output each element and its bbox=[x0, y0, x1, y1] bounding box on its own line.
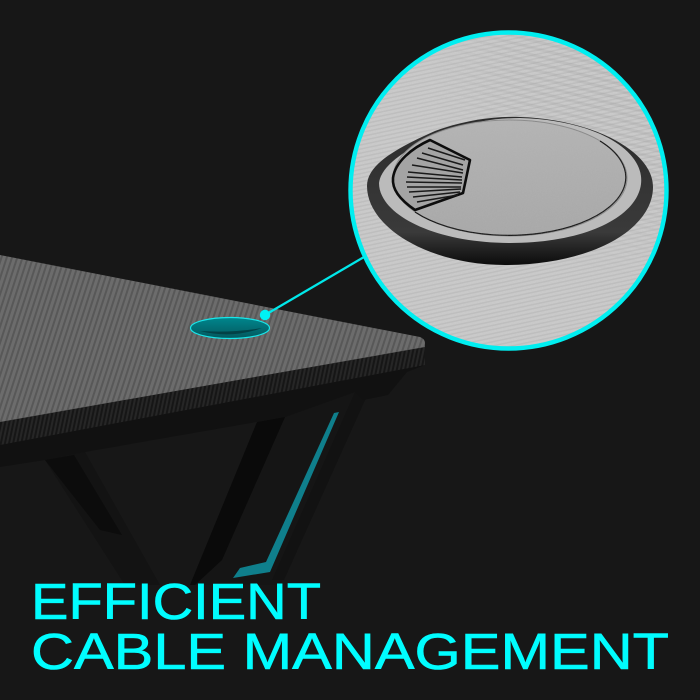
grommet lid plate bbox=[393, 120, 627, 236]
desk illustration bbox=[0, 255, 425, 585]
desk front edge bbox=[0, 347, 425, 445]
callout magnifier circle bbox=[345, 28, 675, 358]
title line 1: EFFICIENT bbox=[31, 573, 321, 630]
callout connector line and dot bbox=[260, 257, 364, 320]
title bbox=[31, 573, 669, 680]
desk underside frame bbox=[0, 365, 425, 467]
magnifier cyan border bbox=[350, 32, 666, 348]
cable flap notch bbox=[393, 140, 470, 210]
grommet bbox=[367, 115, 653, 265]
grommet light rim bbox=[379, 118, 641, 243]
right desk leg bbox=[190, 392, 366, 585]
grommet outer dark ring bbox=[367, 117, 653, 265]
left desk leg bbox=[45, 452, 160, 585]
cable hole bbox=[190, 318, 270, 338]
leg cyan accent stripe bbox=[233, 412, 339, 578]
desk top surface bbox=[0, 255, 425, 422]
title line 2: CABLE MANAGEMENT bbox=[31, 623, 669, 680]
flap ridges bbox=[406, 148, 465, 202]
